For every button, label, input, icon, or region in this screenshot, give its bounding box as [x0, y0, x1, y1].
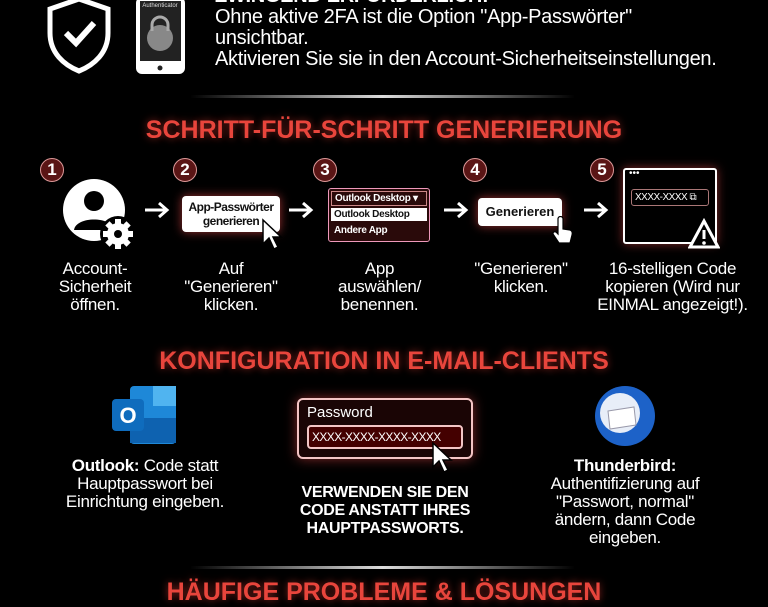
- step 4: klicken.: [494, 277, 548, 296]
- step 5: •••: [629, 168, 640, 179]
- thunderbird: Thunderbird:: [574, 456, 676, 475]
- step 5: XXXX-XXXX ⧉: [635, 192, 696, 203]
- heading: steps: SCHRITT-FÜR-SCHRITT GENERIERUNG: [146, 116, 622, 144]
- step 1: 1: [47, 160, 57, 179]
- password box: CODE ANSTATT IHRES: [300, 502, 470, 519]
- step 3: benennen.: [341, 295, 418, 314]
- step 3: App: [365, 259, 394, 278]
- step 3: 3: [320, 160, 330, 179]
- heading: config: KONFIGURATION IN E-MAIL-CLIENTS: [159, 347, 609, 375]
- icon: phone: Authenticator: [142, 3, 178, 9]
- step 5: 16-stelligen Code: [609, 259, 736, 278]
- step 5: EINMAL angezeigt!).: [597, 295, 748, 314]
- thunderbird: "Passwort, normal": [556, 492, 694, 511]
- top text: Ohne aktive 2FA ist die Option "App-Passwörter": [215, 6, 632, 28]
- outlook: Outlook: Code statt: [72, 456, 218, 475]
- step 2: Auf: [219, 259, 243, 278]
- outlook: Hauptpasswort bei: [77, 474, 213, 493]
- step 1: [40, 158, 133, 314]
- thunderbird: [550, 386, 700, 547]
- step 2: App-Passwörter: [188, 200, 274, 214]
- outlook: O: [119, 403, 137, 428]
- icon: shield: [48, 0, 110, 74]
- step 3: auswählen/: [338, 277, 421, 296]
- arrow: [289, 202, 314, 218]
- step 4: "Generieren": [474, 259, 568, 278]
- icon: phone: [136, 0, 185, 74]
- thunderbird: eingeben.: [589, 528, 661, 547]
- step 2: [173, 158, 288, 314]
- step 5: [590, 158, 748, 314]
- step 2: generieren: [203, 214, 259, 228]
- step 2: klicken.: [204, 295, 258, 314]
- arrow: [444, 202, 468, 218]
- heading: problems: HÄUFIGE PROBLEME & LÖSUNGEN: [167, 578, 601, 606]
- password box: Password: [307, 404, 373, 421]
- step 4: 4: [470, 160, 480, 179]
- top text: unsichtbar.: [215, 27, 308, 49]
- outlook: [66, 386, 224, 511]
- top text: [215, 0, 716, 70]
- outlook: Einrichtung eingeben.: [66, 492, 224, 511]
- password box: VERWENDEN SIE DEN: [301, 484, 469, 501]
- thunderbird: ändern, dann Code: [555, 510, 695, 529]
- top text: Aktivieren Sie sie in den Account-Sicherheitseinstellungen.: [215, 48, 716, 70]
- step 3: Outlook Desktop ▾: [335, 193, 418, 204]
- step 3: Outlook Desktop: [334, 209, 410, 220]
- step 5: kopieren (Wird nur: [605, 277, 740, 296]
- step 2: "Generieren": [184, 277, 278, 296]
- arrow: [145, 202, 170, 218]
- step 1: Sicherheit: [59, 277, 131, 296]
- step 3: Andere App: [334, 225, 387, 236]
- step 1: öffnen.: [70, 295, 120, 314]
- password box: [288, 389, 482, 537]
- step 2: 2: [180, 160, 190, 179]
- password box: HAUPTPASSWORTS.: [306, 520, 464, 537]
- arrow: [584, 202, 608, 218]
- step 1: Account-: [63, 259, 127, 278]
- step 5: 5: [597, 160, 607, 179]
- thunderbird: Authentifizierung auf: [551, 474, 699, 493]
- step 3: [313, 158, 430, 314]
- step 4: Generieren: [486, 204, 554, 219]
- password box: XXXX-XXXX-XXXX-XXXX: [312, 430, 441, 444]
- step 4: [463, 158, 572, 296]
